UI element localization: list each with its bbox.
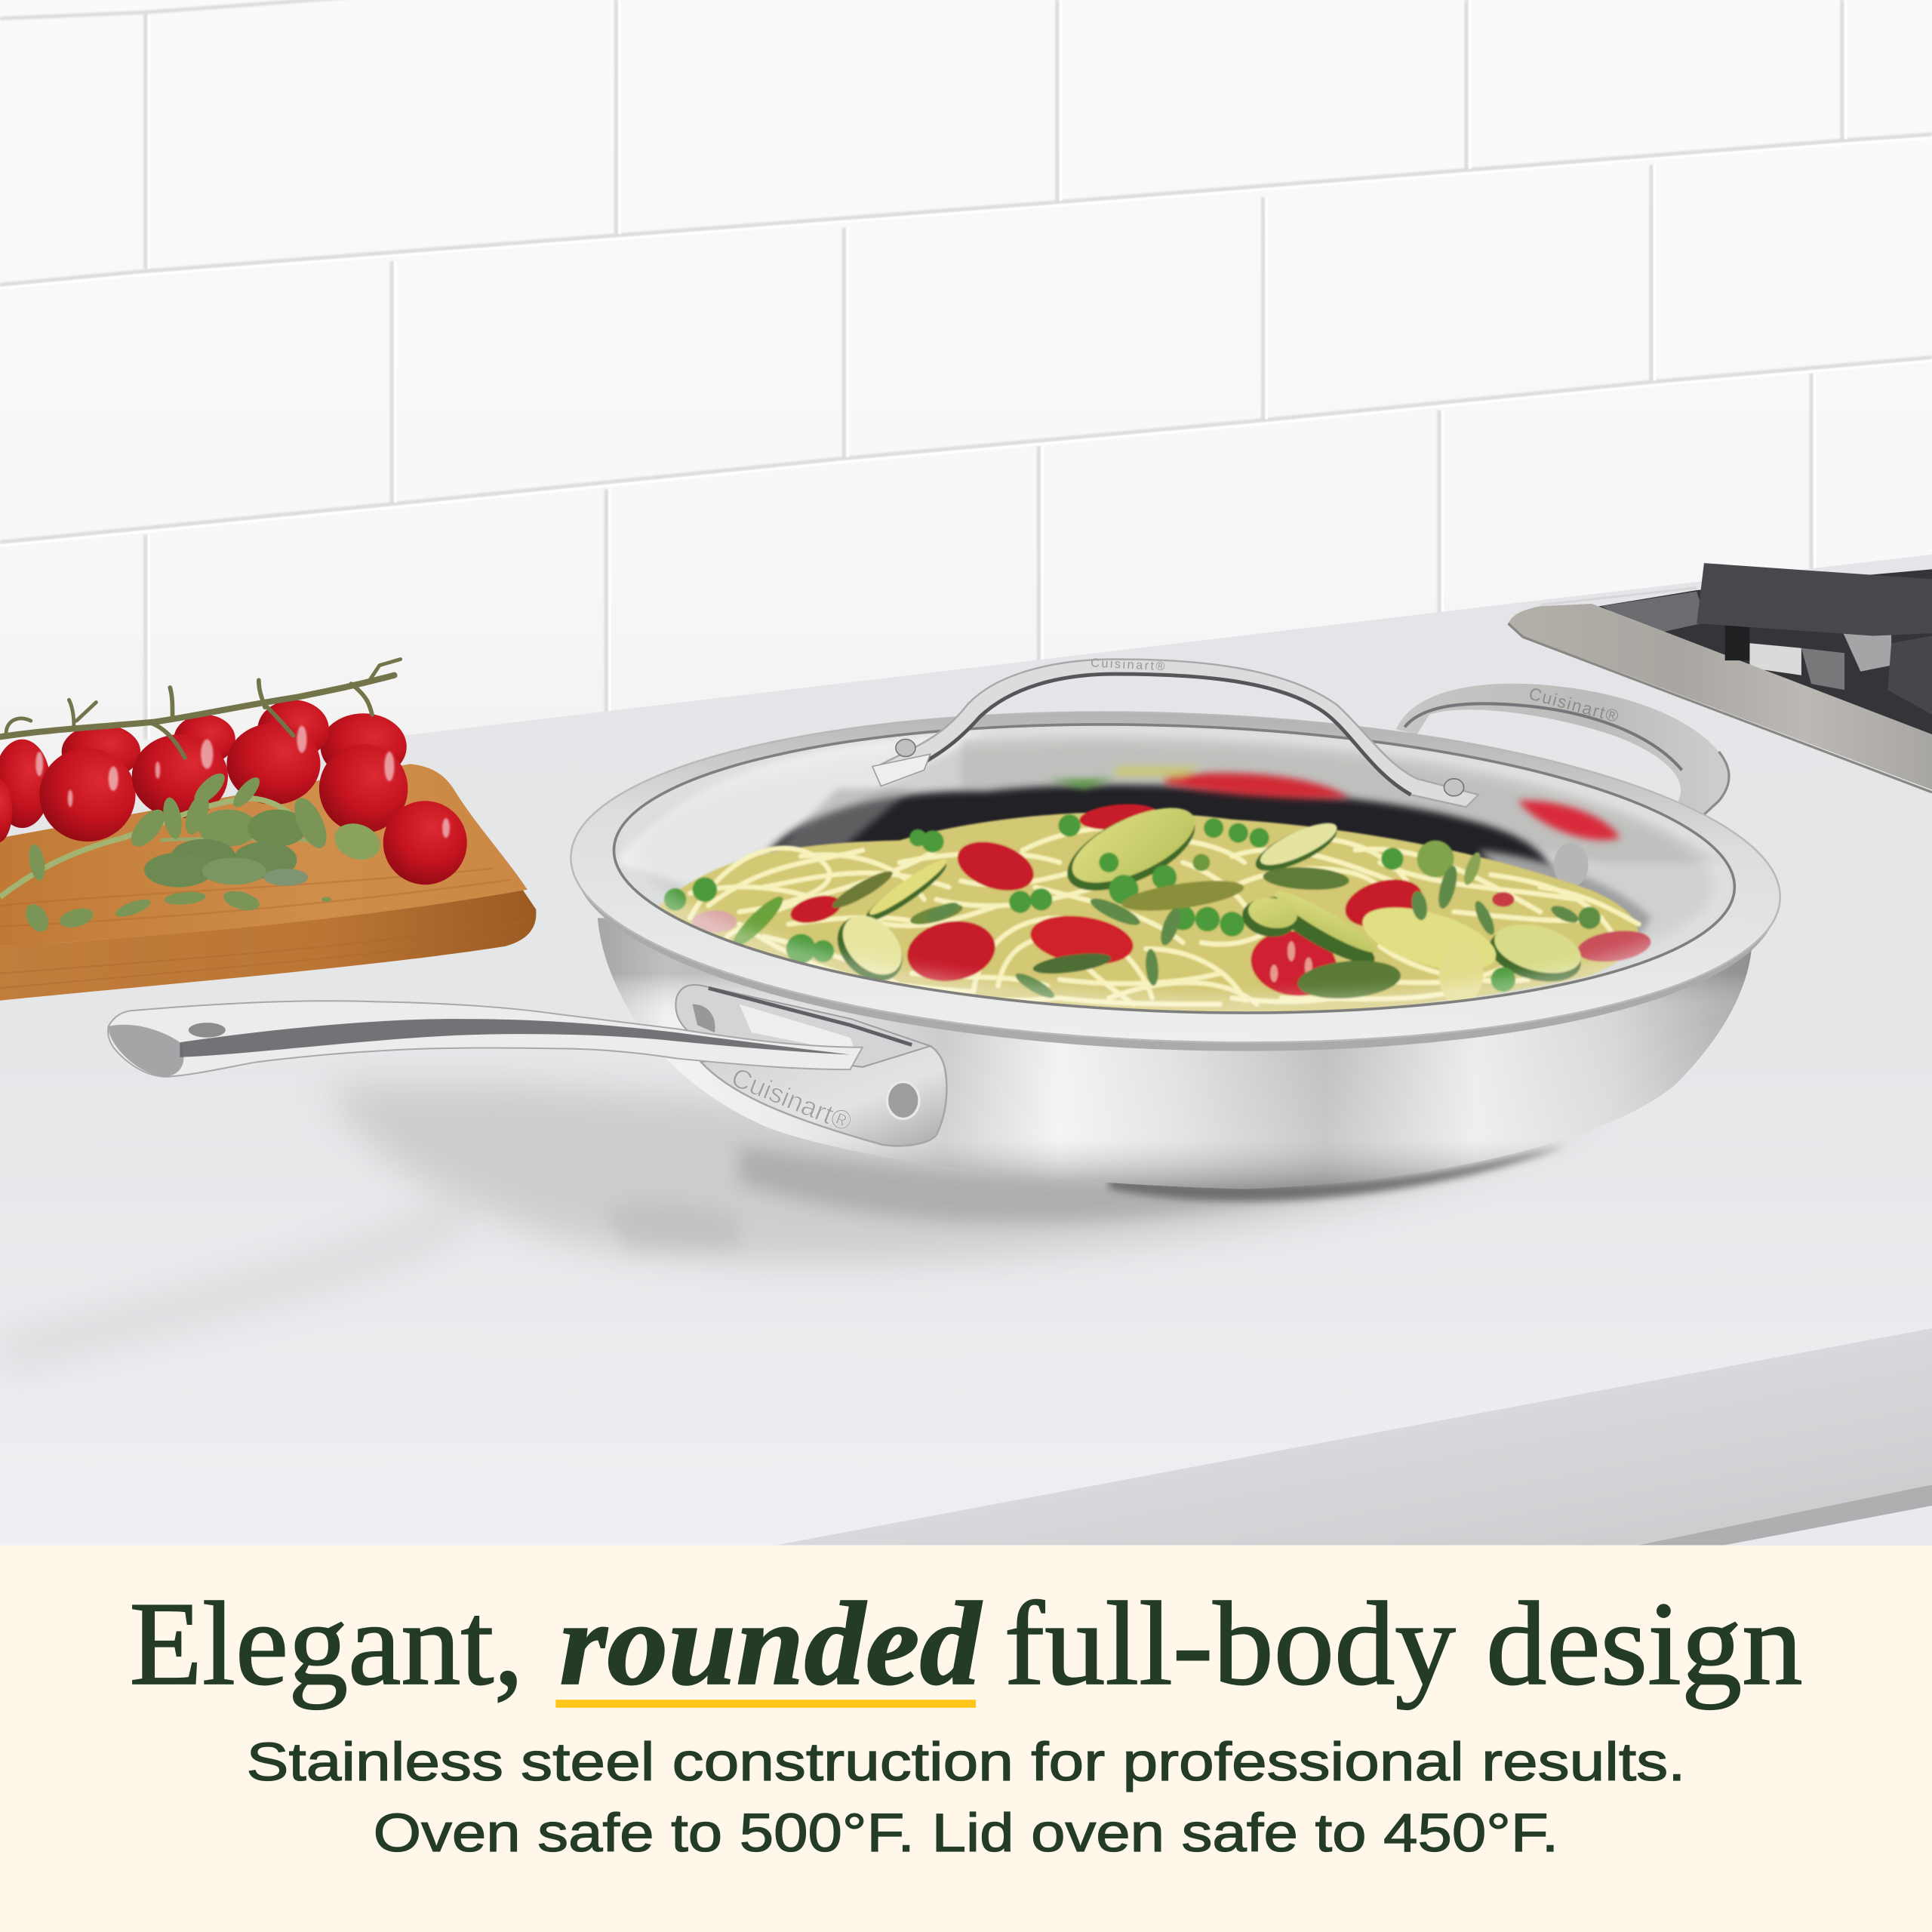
pan rim <box>570 711 1781 1043</box>
handle arm <box>108 1001 863 1077</box>
caption band <box>0 1546 1932 1932</box>
rivet <box>888 1081 919 1118</box>
pan body <box>581 889 1770 1189</box>
dark pan interior reflection <box>770 785 1552 881</box>
photo: kitchen scene <box>0 0 1932 1545</box>
spaghetti strands <box>690 828 1638 1004</box>
reflected food in lid <box>1048 767 1651 937</box>
headline: full-body design <box>1004 1578 1803 1710</box>
vine stem <box>0 659 401 758</box>
lid handle <box>872 656 1478 807</box>
oregano sprig <box>0 768 385 936</box>
chrome lid rivet reflection <box>1554 843 1588 888</box>
cherry tomatoes on the vine <box>0 659 476 894</box>
peas <box>664 814 1601 992</box>
long pan handle with riveted plate <box>108 985 946 1146</box>
handle mounting plate <box>701 1046 946 1146</box>
subheading: Oven safe to 500°F. Lid oven safe to 450°F. <box>374 1803 1558 1863</box>
inner rim line <box>609 706 1740 1031</box>
asparagus <box>728 865 1402 1002</box>
engraved brand on rear handle: Cuisinart® <box>1527 683 1622 726</box>
headline: rounded <box>559 1578 983 1710</box>
zucchini slices <box>825 793 1587 994</box>
shadow of pan on counter <box>0 1084 1601 1355</box>
engraved brand on lid handle: Cuisinart® <box>1091 656 1167 674</box>
herb leaves in pasta <box>924 851 1581 1002</box>
cutting board <box>0 764 536 1001</box>
handle bracket <box>675 985 931 1067</box>
yellow underline <box>555 1700 976 1708</box>
subheading: Stainless steel construction for professional results. <box>247 1732 1685 1792</box>
subheading <box>247 1732 1685 1863</box>
engraved brand on plate: Cuisinart® <box>728 1061 857 1137</box>
tomatoes in pasta <box>693 801 1653 1002</box>
handle hang hole <box>189 1023 226 1038</box>
glass lid with food <box>622 726 1714 1011</box>
rear pan loop handle <box>1396 683 1729 816</box>
gas stove <box>1508 563 1932 792</box>
countertop <box>0 555 1932 1545</box>
glass edge haze <box>618 712 1730 1026</box>
lid handle rivets <box>896 740 915 756</box>
pasta mound <box>658 792 1653 1015</box>
counter front edge <box>777 1328 1932 1545</box>
headline: Elegant, <box>129 1578 524 1710</box>
headline <box>129 1578 1803 1710</box>
tiled wall <box>0 0 1932 789</box>
